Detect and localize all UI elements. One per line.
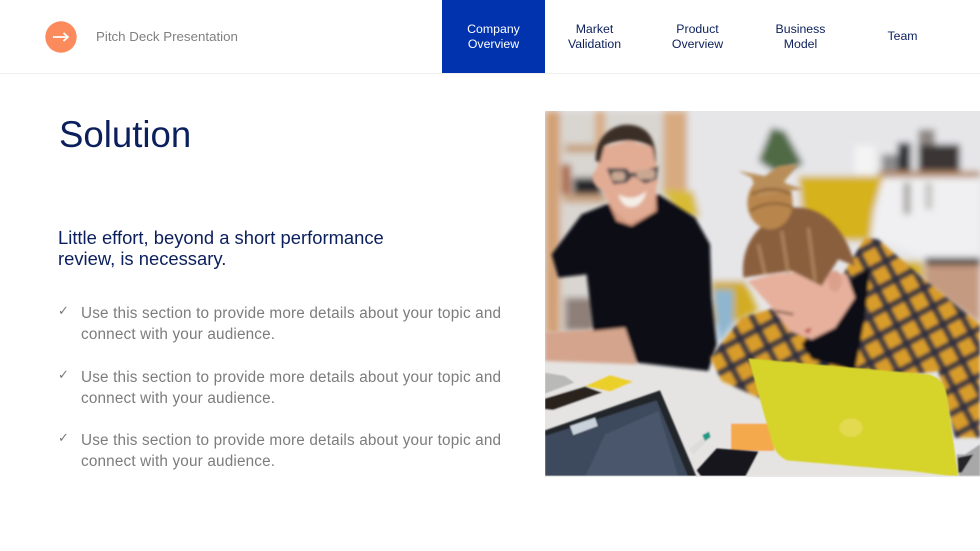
- bullet 1: connect with your audience.: [81, 326, 275, 342]
- icon: check 1: ✓: [58, 304, 69, 319]
- subheading: [58, 227, 384, 269]
- bullet 2: Use this section to provide more details about your topic and: [81, 369, 501, 386]
- icon: check 2: ✓: [58, 368, 69, 383]
- nav: company overview active: Company: [467, 22, 520, 36]
- subheading: review, is necessary.: [58, 248, 226, 268]
- bullet 2: connect with your audience.: [81, 390, 275, 406]
- icon: check 3: ✓: [58, 431, 69, 446]
- nav: market validation: Validation: [568, 36, 621, 50]
- nav: business model: [776, 22, 825, 50]
- bullet 3: connect with your audience.: [81, 452, 275, 470]
- nav: market validation: [568, 22, 621, 50]
- man in black sweater: [545, 124, 717, 370]
- nav: business model: Business: [776, 22, 825, 36]
- bullet 1: Use this section to provide more details about your topic and: [81, 305, 501, 322]
- bullet 1: [58, 304, 501, 342]
- table: [545, 360, 980, 476]
- nav: product overview: Product: [676, 22, 719, 36]
- nav: market validation: Market: [576, 22, 613, 36]
- photo: two colleagues laughing at laptops: [545, 111, 980, 477]
- icon: orange arrow circle: [45, 21, 77, 53]
- nav: product overview: Overview: [672, 36, 723, 50]
- nav: company overview active: [442, 0, 545, 73]
- blurred background: [545, 110, 980, 344]
- bullet 2: [58, 368, 501, 406]
- title: Solution: [59, 114, 191, 155]
- nav: team: Team: [887, 29, 918, 43]
- header bar: [0, 0, 980, 74]
- subheading: Little effort, beyond a short performance: [58, 227, 384, 248]
- deck label: Pitch Deck Presentation: [96, 29, 238, 44]
- bullet 3: [58, 431, 501, 470]
- nav: company overview active: Overview: [468, 36, 519, 50]
- dark laptop and phone: [545, 390, 758, 476]
- yellow laptop: [748, 358, 980, 476]
- woman in plaid shirt: [710, 164, 980, 437]
- nav: business model: Model: [784, 36, 817, 50]
- nav: product overview: [672, 22, 724, 50]
- bullet 3: Use this section to provide more details about your topic and: [81, 432, 501, 449]
